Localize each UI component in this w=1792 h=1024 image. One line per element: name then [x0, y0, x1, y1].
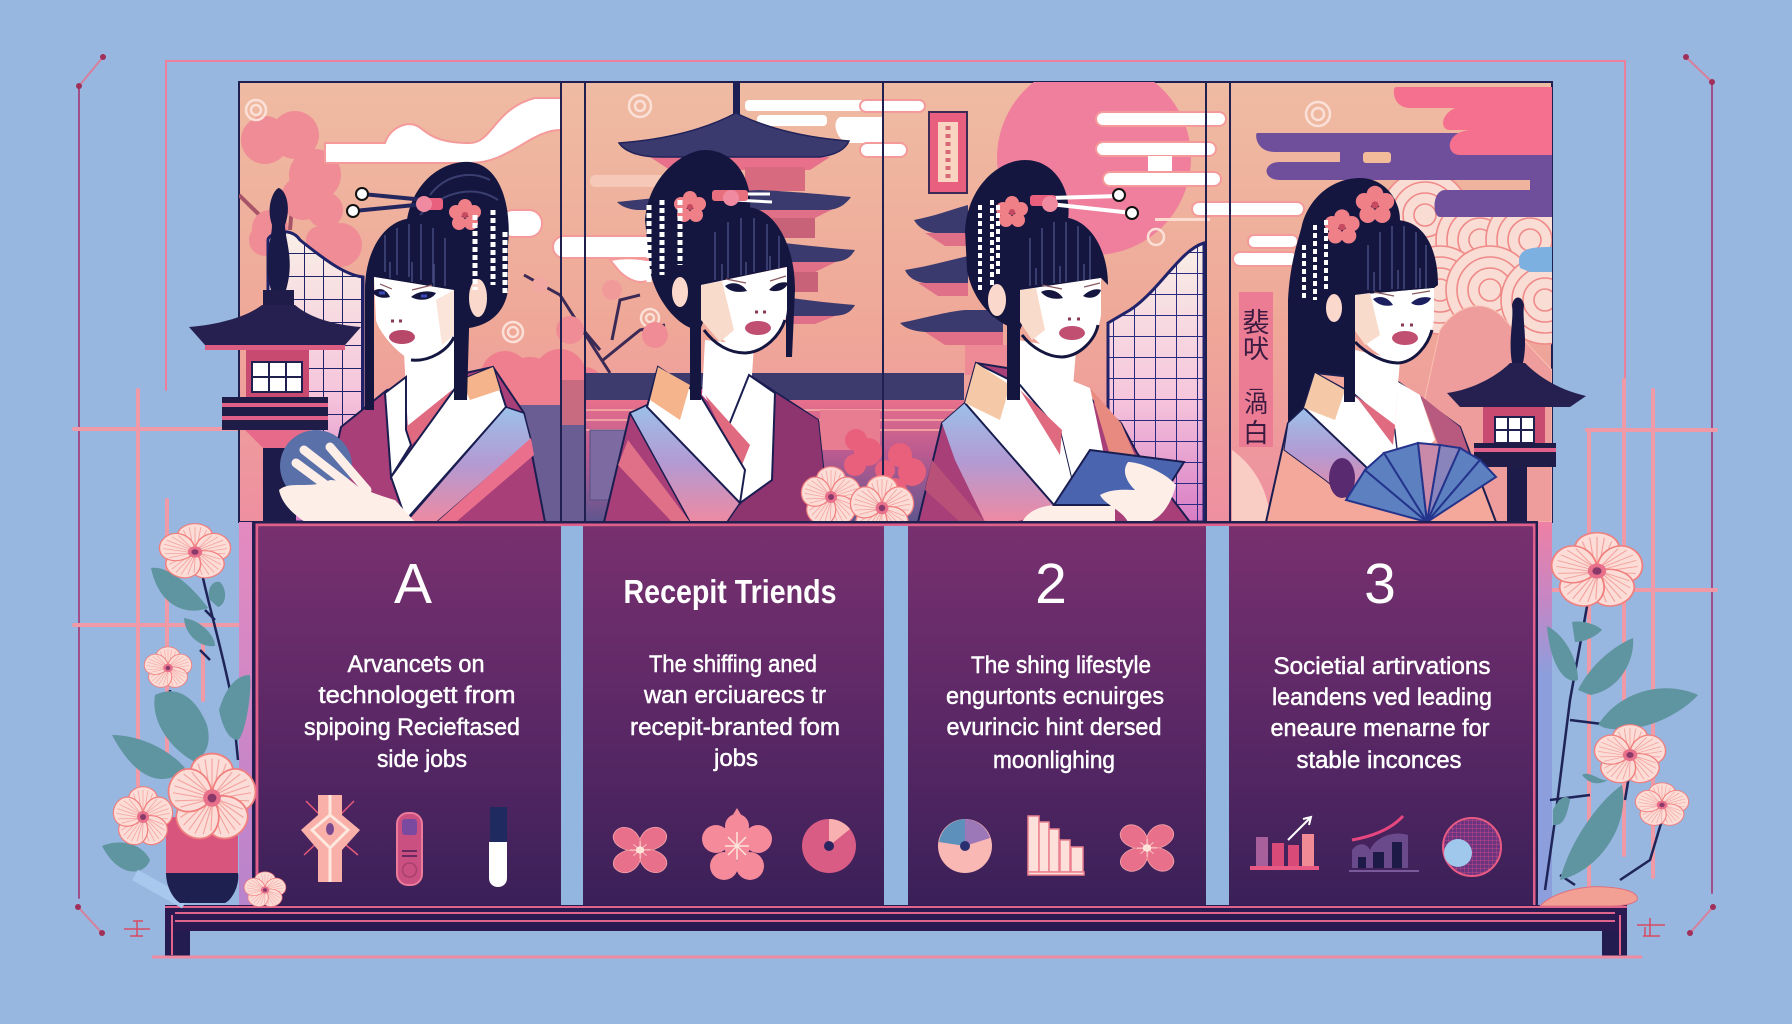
text block: Arvancets on [348, 651, 484, 678]
face [1355, 288, 1434, 363]
right collar [715, 375, 775, 503]
icon: globe [1443, 818, 1501, 876]
lower hand [1022, 505, 1115, 522]
text block: The shing lifestyle [971, 652, 1151, 679]
figure 1: woman holding a sphere [279, 162, 545, 522]
eyes [1373, 297, 1431, 306]
kimono [1266, 373, 1496, 522]
sleeve stripes [942, 403, 1075, 522]
hair pin [347, 188, 443, 217]
figure 2: woman in front of the pagoda [604, 150, 829, 522]
bun highlights [420, 175, 498, 215]
text block [1270, 653, 1492, 774]
heading: Recepit Triends [624, 573, 836, 610]
icon: gem cross [301, 795, 360, 882]
ear [987, 283, 1007, 317]
panel: A [259, 527, 561, 905]
neck [702, 340, 754, 425]
text block: recepit-branted fom [630, 714, 840, 741]
icon: rising curve with arches [1349, 816, 1419, 872]
icon: blossom [1115, 820, 1179, 876]
sleeve stripes [406, 407, 531, 522]
outer frame lines and lattice [74, 54, 1716, 936]
light branch [135, 875, 185, 903]
hanging beads [475, 210, 505, 295]
ear [468, 278, 488, 318]
banner with calligraphy: 裴 [1242, 308, 1270, 338]
face [374, 277, 454, 360]
kimono [320, 367, 545, 522]
mural background [239, 82, 1552, 522]
neck [1018, 340, 1076, 435]
icon: cherry flower [702, 808, 772, 880]
long hair and bun [1288, 178, 1400, 427]
blue cloud [1519, 247, 1552, 272]
under collar [1355, 395, 1395, 445]
text block: wan erciuarecs tr [643, 682, 826, 709]
tablet [1054, 450, 1184, 505]
text block [946, 652, 1164, 774]
hair bun [965, 160, 1069, 330]
text block: stable inconces [1296, 747, 1462, 774]
right flower arrangement [1540, 533, 1698, 906]
under collar [705, 395, 750, 470]
hair flowers [449, 199, 481, 230]
neck [1355, 350, 1400, 425]
sleeve stripes [1284, 408, 1390, 500]
lips [745, 321, 771, 335]
hanging beads [980, 200, 998, 290]
lantern right [1447, 298, 1586, 522]
flowers [110, 524, 288, 910]
lips [389, 330, 415, 344]
text block: evurincic hint dersed [946, 714, 1162, 741]
cushion [1540, 887, 1637, 906]
hair bun [645, 150, 750, 330]
stems [170, 578, 238, 760]
shelf [152, 905, 1642, 957]
kimono [604, 375, 829, 522]
heading: A [394, 552, 432, 616]
text block [304, 651, 520, 773]
wave lines bottom of fourth panel [1232, 450, 1270, 522]
left flower arrangement [102, 524, 288, 910]
hair pin [712, 190, 772, 206]
text block: Societial artirvations [1274, 653, 1490, 680]
front hair [365, 218, 470, 410]
heading: 2 [1035, 552, 1067, 616]
kimono [918, 363, 1190, 522]
face [1020, 278, 1101, 357]
hair flowers [1324, 186, 1394, 244]
nose [1401, 324, 1413, 326]
ear [671, 276, 689, 308]
purple cloud [1256, 133, 1552, 217]
hand [279, 480, 415, 522]
jaw [704, 320, 785, 353]
left collar [1304, 373, 1400, 485]
icon: blossom four petals [608, 823, 672, 877]
neck [404, 335, 465, 432]
sun [997, 82, 1191, 254]
hanging beads [1304, 220, 1326, 300]
face [701, 267, 787, 353]
banner with calligraphy [1239, 292, 1273, 448]
panel: 2 [908, 527, 1206, 905]
text block [630, 651, 840, 772]
fingers [296, 447, 367, 500]
lips [1392, 331, 1418, 345]
text block: engurtonts ecnuirges [946, 683, 1164, 710]
sphere [280, 430, 352, 502]
vase [166, 817, 238, 903]
figure 3: woman with a tablet [918, 160, 1190, 522]
pagoda: second panel [617, 82, 855, 324]
irises [379, 293, 427, 296]
clouds and scroll: third panel [860, 100, 1304, 266]
marks beneath the frame [124, 918, 1665, 936]
panel: 3 [1229, 527, 1533, 905]
bangs highlights [715, 218, 779, 280]
eyes [725, 282, 788, 292]
flowers [1546, 533, 1692, 829]
icon: tube [489, 807, 507, 887]
jaw [1022, 325, 1098, 357]
icon: device [397, 813, 422, 885]
icon: pie chart [802, 819, 856, 873]
leaves [1547, 622, 1698, 880]
blossoms at the temple wall [844, 429, 926, 489]
swirl ornaments [246, 95, 1330, 342]
jaw [411, 337, 454, 360]
eyes [1041, 289, 1101, 299]
mountains [1420, 306, 1552, 522]
hanging beads [649, 200, 680, 285]
panel: Recepit Trends [583, 527, 884, 905]
pink cloud [1394, 87, 1552, 155]
ear [1325, 293, 1343, 323]
leaves [102, 568, 250, 872]
dark button [1329, 458, 1355, 498]
heading: 3 [1364, 552, 1396, 616]
gaps between panels [561, 526, 1229, 905]
banner with calligraphy: 吠 [1243, 334, 1269, 364]
flowers at base of figure 2 [798, 467, 918, 543]
jaw [1355, 330, 1432, 363]
shoji screen left [266, 230, 364, 521]
banner with calligraphy: 渦 [1244, 391, 1268, 418]
under collar [406, 390, 465, 445]
hair flowers [996, 196, 1028, 227]
banner with calligraphy: 一 [1249, 382, 1263, 398]
icon: descending bars [1028, 816, 1084, 875]
under collar [1020, 390, 1062, 455]
blossom branch [524, 275, 668, 373]
sleeve stripes [630, 405, 740, 522]
nose [1068, 318, 1080, 320]
text block: technologett from [318, 682, 516, 709]
pink trees behind the first figure [482, 349, 598, 405]
hair pin [1030, 189, 1138, 219]
bangs highlights [1030, 222, 1090, 286]
right collar [1395, 382, 1435, 470]
pagoda: third panel [900, 205, 1010, 375]
panel frame inner line [257, 525, 1534, 905]
right collar [1062, 377, 1105, 490]
bangs highlights [385, 224, 445, 286]
text block: leandens ved leading [1272, 684, 1492, 711]
text block: The shiffing aned [649, 651, 817, 678]
hand on tablet [1100, 462, 1176, 522]
text block: side jobs [377, 746, 467, 773]
hair bun [406, 162, 509, 328]
icon: pie chart [938, 819, 992, 873]
nose [391, 320, 402, 322]
stems [1545, 590, 1662, 890]
bangs highlights [1368, 226, 1426, 291]
hanging scroll [929, 112, 967, 193]
left collar [965, 363, 1075, 505]
vertical dividers of the mural [561, 82, 1230, 522]
banner with calligraphy: 白 [1243, 418, 1269, 448]
mural scenery [239, 61, 1589, 522]
text block: spipoing Recieftased [304, 714, 520, 741]
hair flowers [674, 191, 706, 222]
eyes [372, 289, 436, 300]
figure 4: woman with a fan of banknotes [1266, 178, 1496, 522]
lips [1059, 326, 1085, 340]
side columns of the mural [239, 522, 1552, 906]
tree: left blossom [239, 111, 362, 280]
temple wall [495, 373, 964, 522]
front hair [690, 207, 795, 400]
front hair [1344, 220, 1438, 402]
icon: bar chart with arrow [1250, 817, 1319, 870]
left collar [647, 367, 745, 503]
right collar [391, 367, 506, 520]
text block: jobs [713, 745, 758, 772]
panel frame [253, 522, 1537, 906]
text block: moonlighing [993, 747, 1115, 774]
shoji screen right [1108, 243, 1204, 522]
banknote fan [1346, 443, 1496, 522]
clouds: first panel [325, 98, 883, 282]
front hair [1007, 217, 1108, 400]
seigaiha waves [1388, 180, 1552, 345]
nose [755, 310, 766, 314]
left collar [385, 377, 411, 477]
lantern left [189, 188, 361, 522]
text block: eneaure menarne for [1270, 715, 1490, 742]
